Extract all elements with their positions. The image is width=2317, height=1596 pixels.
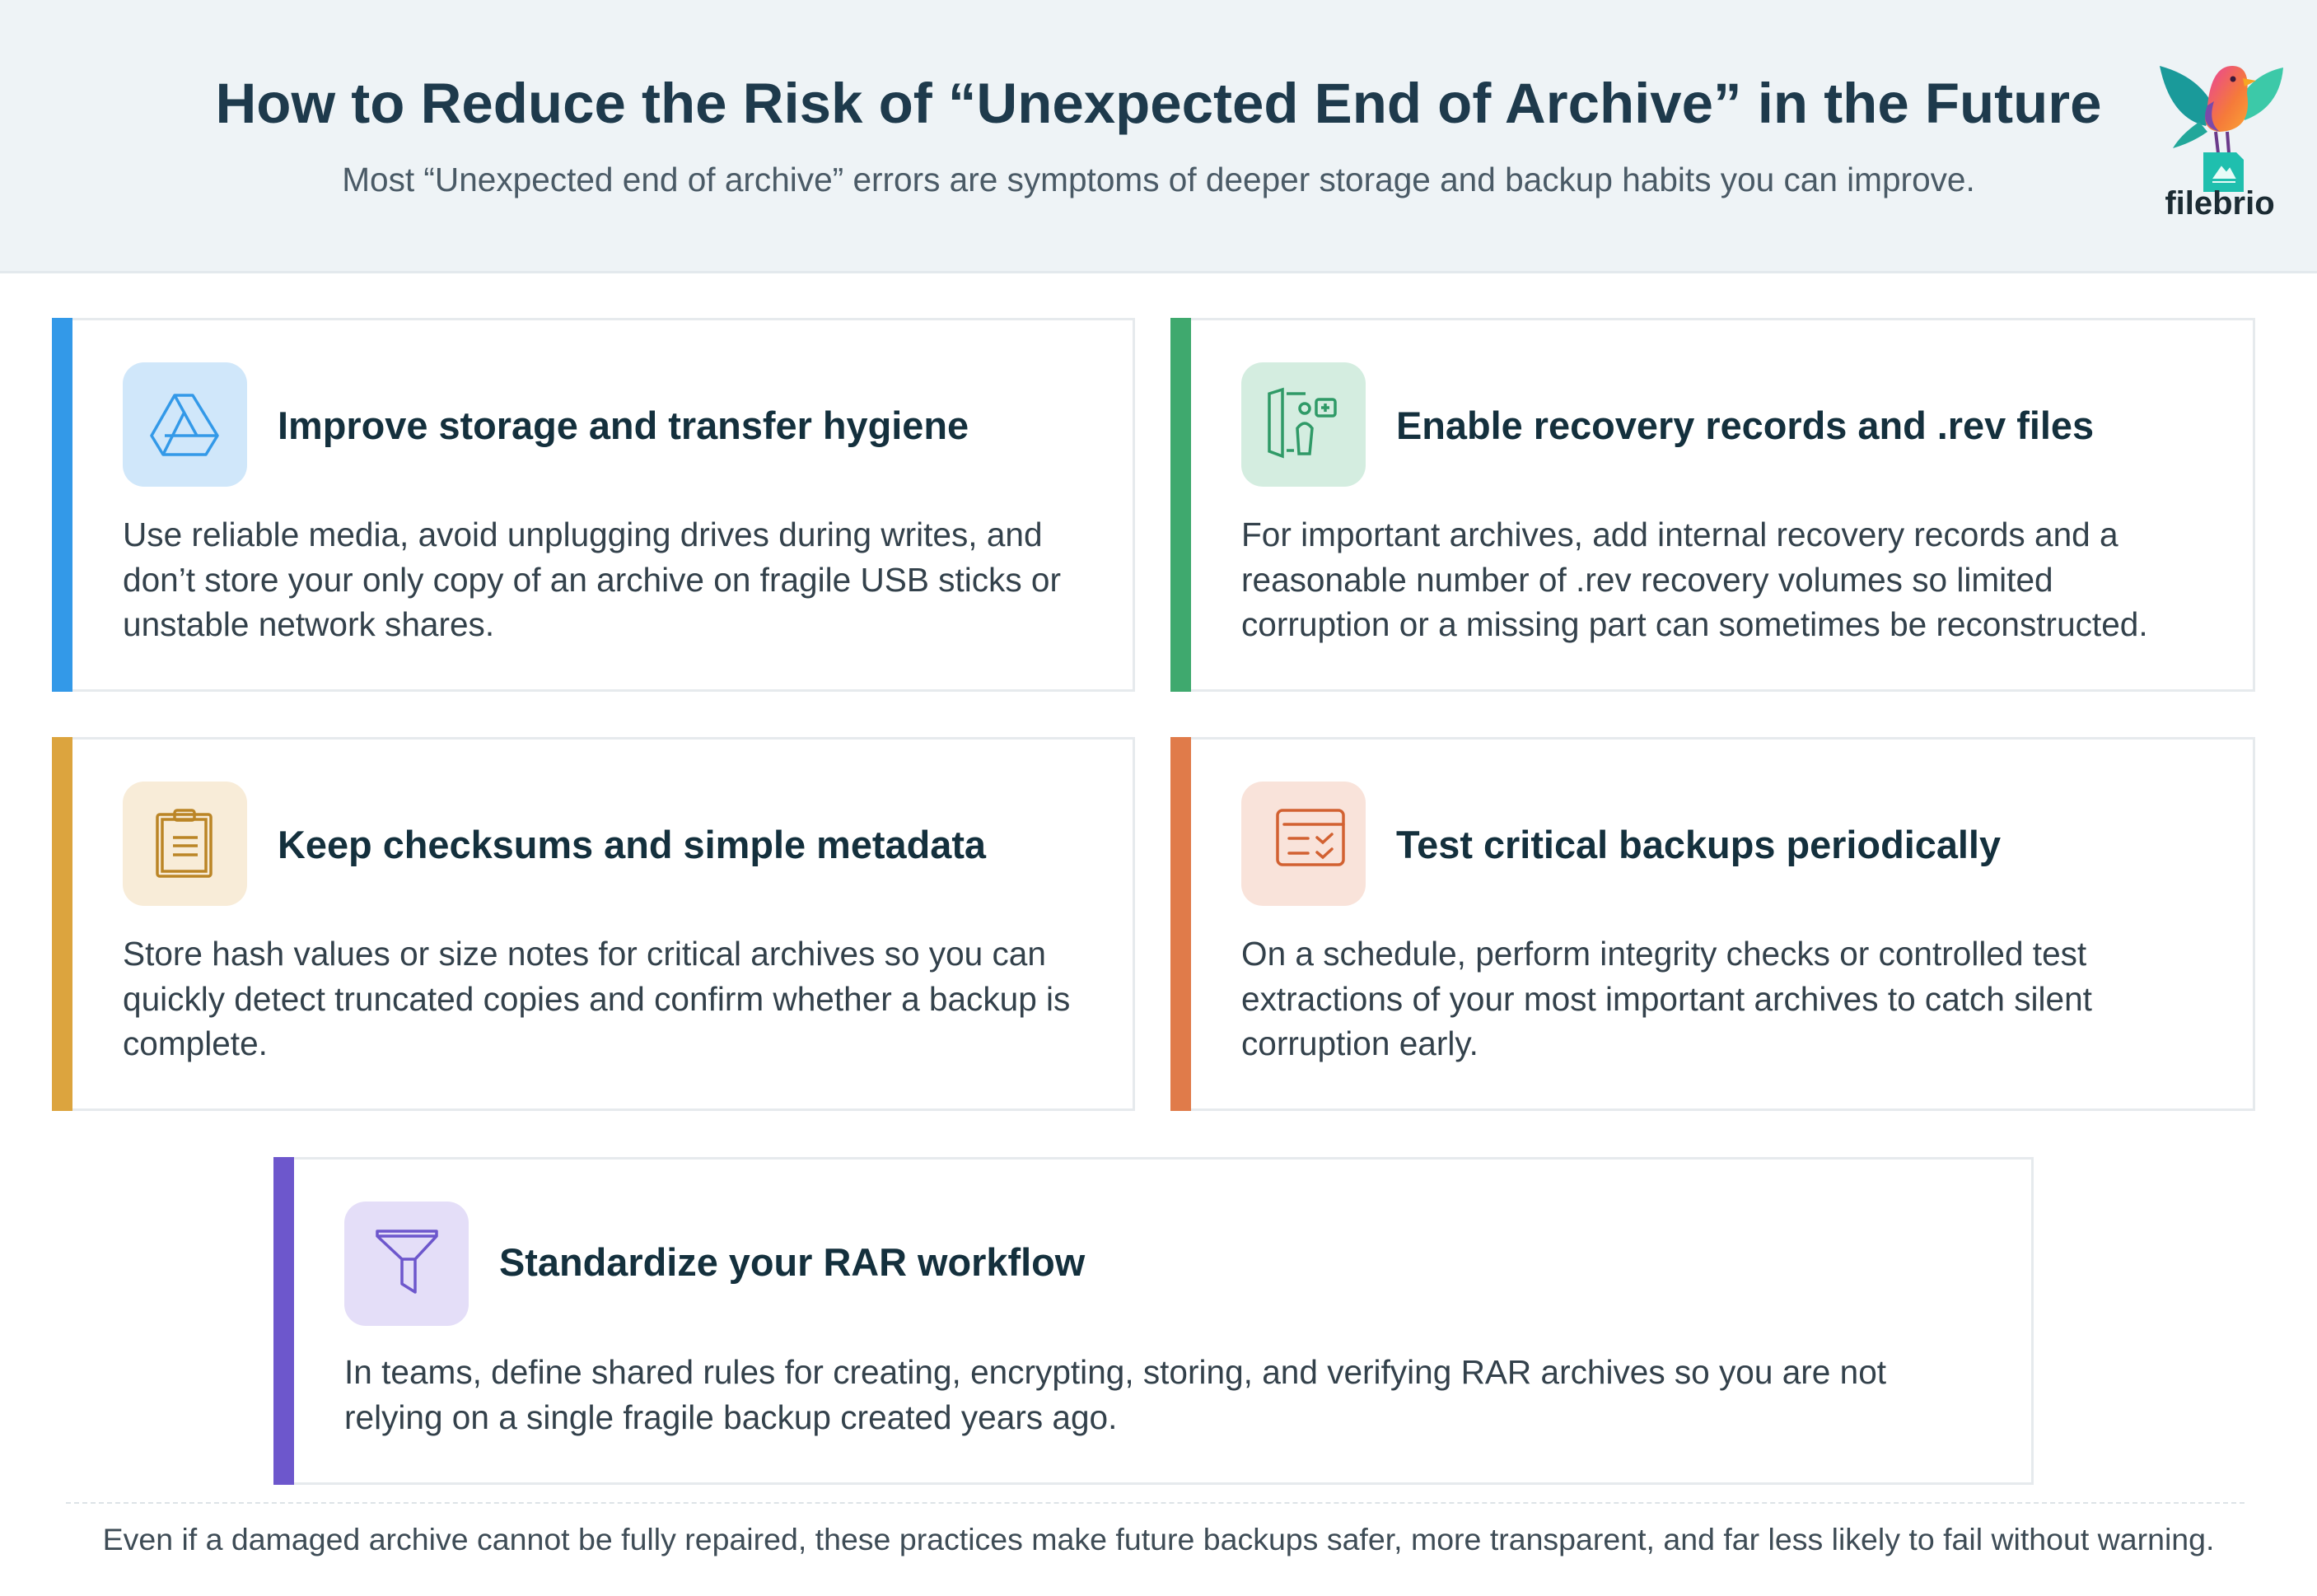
body text — [1241, 935, 2092, 1062]
panel: checksums — [52, 737, 1135, 1111]
body text: relying on a single fragile backup created years ago. — [344, 1398, 1117, 1436]
heading: Improve storage and transfer hygiene — [278, 404, 969, 447]
heading: Keep checksums and simple metadata — [278, 824, 986, 866]
body text: reasonable number of .rev recovery volumes so limited — [1241, 561, 2053, 599]
body text — [344, 1353, 1886, 1436]
body text: corruption or a missing part can sometimes be reconstructed. — [1241, 605, 2148, 643]
body text: corruption early. — [1241, 1024, 1478, 1062]
heading: Enable recovery records and .rev files — [1396, 404, 2094, 447]
icon: funnel — [344, 1202, 469, 1326]
body text: complete. — [123, 1024, 268, 1062]
body text: Store hash values or size notes for critical archives so you can — [123, 935, 1046, 973]
body text: extractions of your most important archives to catch silent — [1241, 980, 2092, 1018]
footer note: Even if a damaged archive cannot be fully repaired, these practices make future backups safer, more transparent, and far less likely to fail without warning. — [103, 1522, 2214, 1556]
panel: recovery records — [1170, 318, 2255, 692]
body text: For important archives, add internal recovery records and a — [1241, 516, 2118, 553]
body text: quickly detect truncated copies and confirm whether a backup is — [123, 980, 1070, 1018]
body text: don’t store your only copy of an archive on fragile USB sticks or — [123, 561, 1061, 599]
subtitle: Most “Unexpected end of archive” errors are symptoms of deeper storage and backup habits you can improve. — [342, 161, 1975, 198]
panel: storage hygiene — [52, 318, 1135, 692]
body text: On a schedule, perform integrity checks or controlled test — [1241, 935, 2086, 973]
icon: checklist window — [1241, 782, 1366, 906]
logo: filebrio: filebrio — [2165, 185, 2275, 222]
logo: filebrio — [2160, 66, 2283, 222]
body text — [123, 935, 1070, 1062]
heading: Standardize your RAR workflow — [499, 1241, 1085, 1284]
panel: test backups — [1170, 737, 2255, 1111]
heading: Test critical backups periodically — [1396, 824, 2001, 866]
body text: In teams, define shared rules for creating, encrypting, storing, and verifying RAR archives so you are not — [344, 1353, 1886, 1391]
icon: door and person — [1241, 362, 1366, 487]
panel: RAR workflow — [273, 1157, 2034, 1485]
header band — [0, 0, 2317, 273]
body text: Use reliable media, avoid unplugging drives during writes, and — [123, 516, 1043, 553]
title: How to Reduce the Risk of “Unexpected End of Archive” in the Future — [215, 72, 2102, 135]
icon: clipboard — [123, 782, 247, 906]
icon: drive — [123, 362, 247, 487]
body text — [1241, 516, 2148, 643]
body text: unstable network shares. — [123, 605, 494, 643]
body text — [123, 516, 1061, 643]
